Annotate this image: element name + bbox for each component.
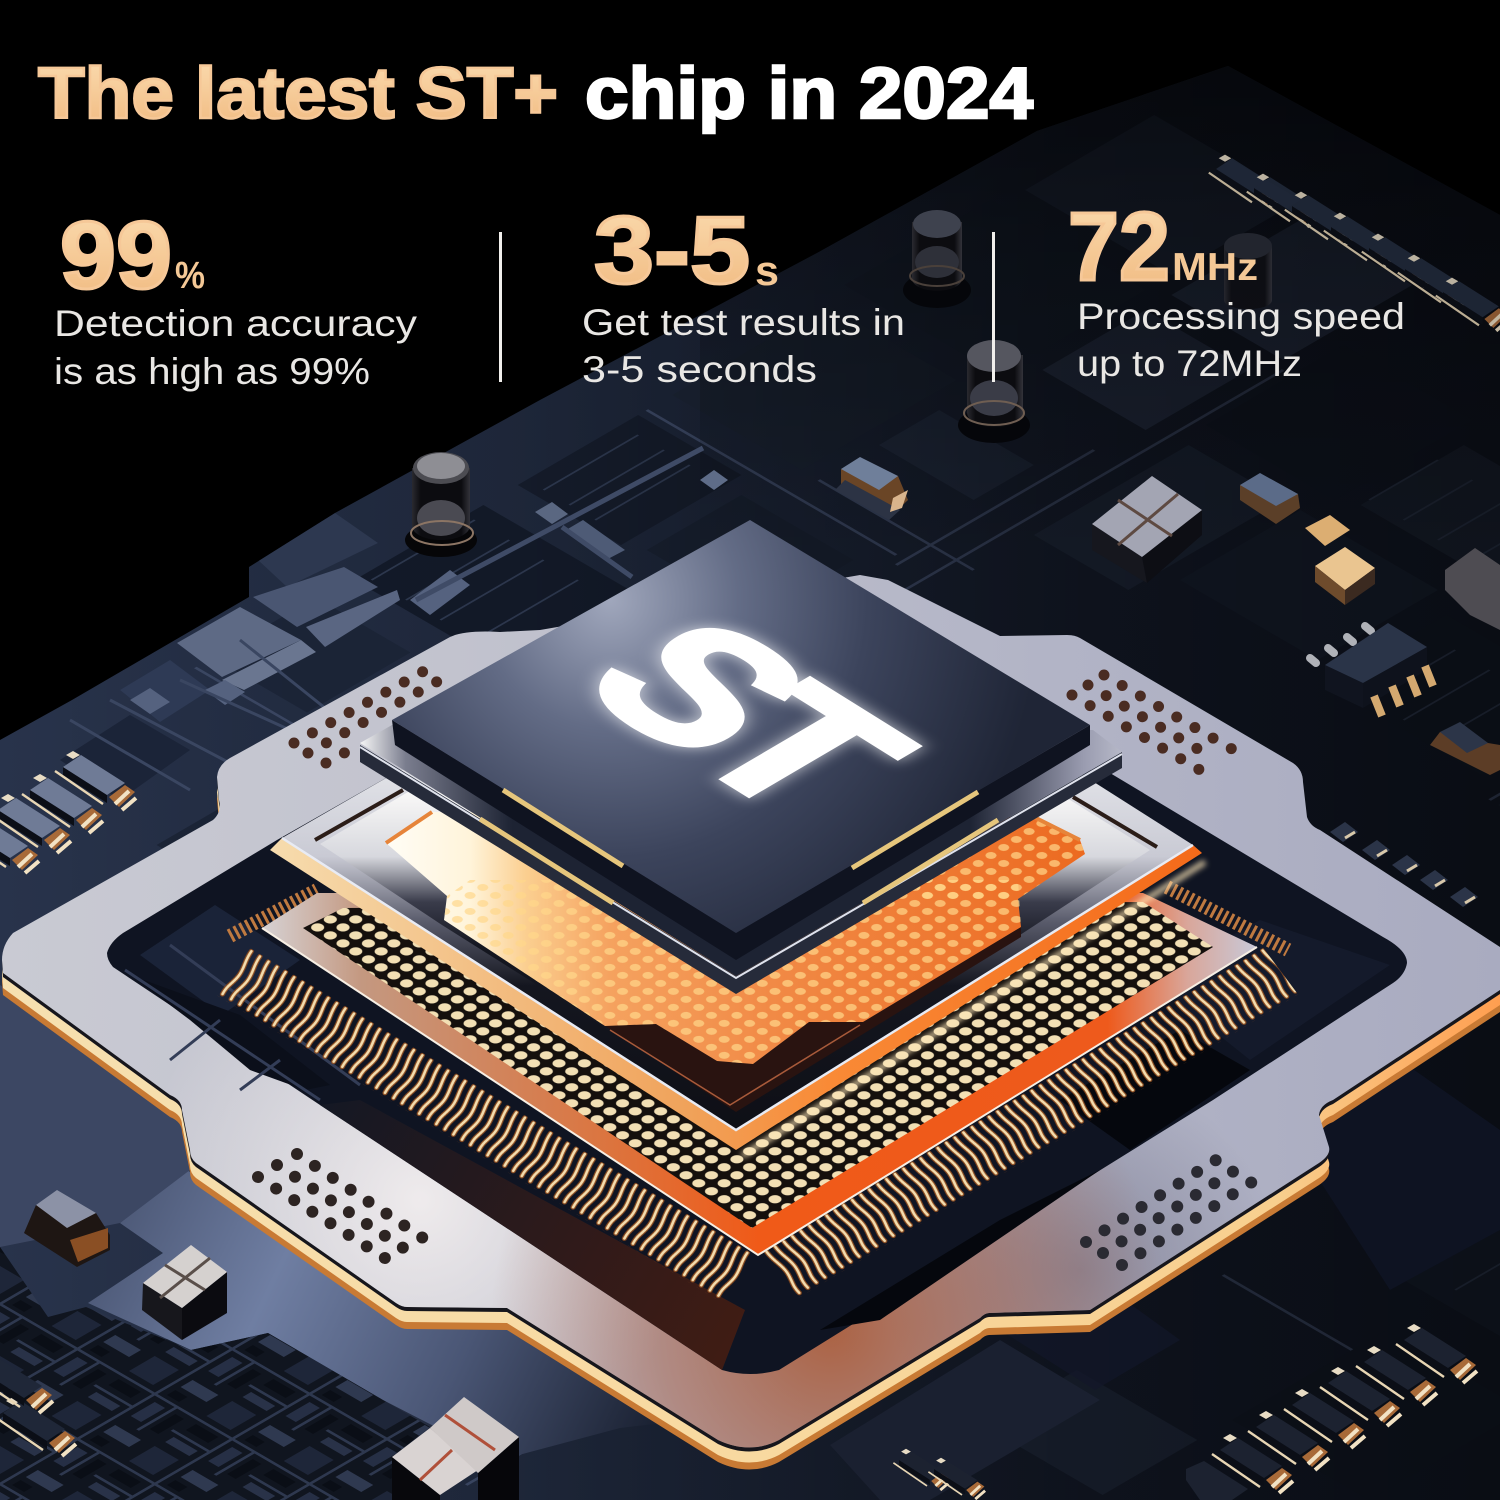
title [38, 54, 1033, 134]
tray recess [320, 792, 1150, 1110]
lower right dark panels [830, 1060, 1500, 1500]
stat: processing speed [1068, 192, 1405, 384]
frame vent holes bottom left [258, 1154, 423, 1260]
traces [194, 369, 1500, 1486]
icon: capacitor right [1224, 233, 1272, 309]
stat: detection accuracy: Detection accuracy [54, 303, 418, 344]
ST logo glow: ST [534, 587, 960, 845]
left plate under frame [0, 985, 190, 1247]
icon: silver block component [1092, 476, 1202, 583]
right and top shading [610, 66, 1500, 1500]
icon: gold components [1305, 515, 1375, 605]
stat: processing speed: 72 [1068, 192, 1170, 301]
chip stack [216, 520, 1298, 1302]
icon: small chip far right [1430, 722, 1500, 775]
tray edge band [270, 838, 1202, 1150]
top chip side [392, 720, 1090, 960]
lit blocks upper left [60, 448, 728, 800]
stat: detection accuracy: % [175, 255, 205, 297]
pins lower left [216, 948, 754, 1302]
icon: small chip upper right [1240, 473, 1300, 524]
frame gold underside [2, 579, 1500, 1470]
die dark notch [444, 920, 1021, 1112]
chip gold contacts [480, 790, 998, 903]
icon: stacked cube lower left [142, 1245, 227, 1340]
board blocks grid [157, 196, 1500, 1494]
icon: capacitor left [405, 452, 477, 557]
stat: processing speed: up to 72MHz [1077, 343, 1302, 384]
orange die [386, 812, 1085, 1064]
frame vent holes bottom right [1086, 1160, 1252, 1265]
hole right details [820, 920, 1390, 1330]
gold ball grid [303, 902, 1213, 1228]
stat: detection accuracy: 99 [60, 202, 172, 309]
stat: processing speed: Processing speed [1077, 296, 1405, 337]
stat: test time: Get test results in [582, 302, 905, 343]
icon: inductor lower left [24, 1190, 110, 1267]
top chip under plate [360, 725, 1122, 976]
stat: processing speed: MHz [1172, 246, 1258, 289]
icon: resistor array lower left [0, 1354, 76, 1456]
top chip face [392, 520, 1090, 933]
substrate plate [262, 893, 1257, 1255]
title: The latest ST+ [38, 54, 558, 134]
lit plate lower left [88, 1171, 636, 1454]
circuit traces lower left [0, 1247, 430, 1500]
stat: detection accuracy: is as high as 99% [54, 351, 370, 392]
pins lower right [763, 948, 1298, 1298]
frame lighting [187, 1065, 1230, 1448]
frame top face [2, 575, 1500, 1448]
top chip under plate side [360, 745, 1122, 994]
divider [992, 232, 995, 382]
stat: test time: 3-5 [594, 197, 750, 304]
ST logo: ST [534, 587, 960, 845]
tray top [282, 770, 1193, 1130]
icon: capacitor centre [958, 340, 1030, 443]
icon: resistor array left [0, 751, 136, 873]
tray slots [315, 790, 1157, 847]
icon: stacked cube bottom [392, 1397, 519, 1500]
title: chip in 2024 [585, 54, 1033, 134]
rear pins right [1167, 887, 1288, 950]
icon: edge component right [1445, 548, 1500, 630]
rear pins left [230, 890, 317, 936]
icon: capacitor top [903, 210, 971, 308]
silver heat spreader frame [0, 575, 1500, 1500]
icon: resistor array lower right [893, 1324, 1477, 1500]
frame hole [107, 770, 1407, 1374]
frame vent holes top right [1072, 675, 1232, 770]
icon: components along right frame [1330, 822, 1478, 907]
frame vent holes top left [294, 671, 440, 763]
icon: resistor array top right [1209, 155, 1500, 331]
icon: IC with legs [1310, 623, 1433, 716]
stat: test time: s [755, 247, 779, 294]
divider [499, 232, 502, 382]
stat: detection accuracy [54, 202, 418, 392]
icon: small chip top [835, 457, 908, 520]
hole left details [125, 905, 360, 1100]
hole reddish reflection [320, 1100, 745, 1370]
grid glow [742, 862, 1205, 1156]
stat: test time: 3-5 seconds [582, 349, 817, 390]
stat: test time [582, 197, 905, 390]
